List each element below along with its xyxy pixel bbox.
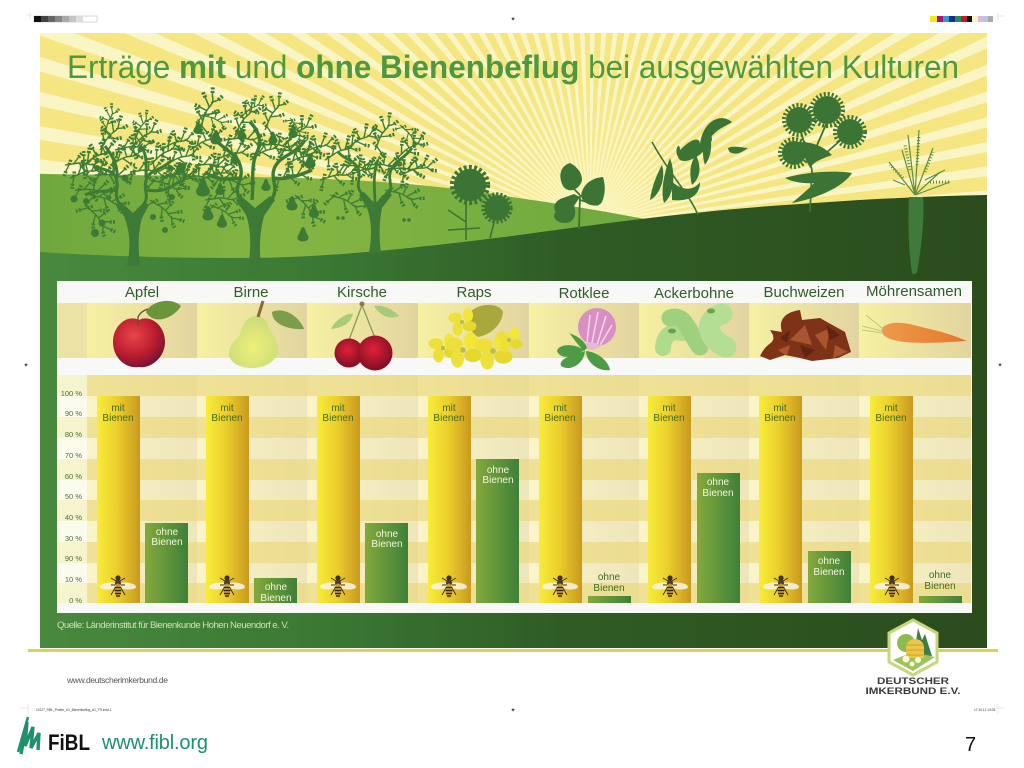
labels: mit Bienen: Bienen: [544, 413, 576, 424]
labels: ohne Bienen on bars: ohne: [376, 529, 399, 540]
labels: ohne Bienen on bars: Bienen: [813, 567, 845, 578]
bar: Buchweizen mit Bienen: [759, 396, 802, 603]
labels: ohne Bienen on bars: ohne: [487, 465, 510, 476]
image: field beans: [663, 308, 726, 348]
column headings: Birne: [233, 284, 269, 301]
logo: FiBL: [18, 717, 90, 755]
registration marks: ✦: [510, 707, 516, 714]
y axis labels: 30 %: [65, 534, 82, 543]
labels: ohne Bienen on bars: ohne: [156, 527, 179, 538]
illustration: red clover: [554, 163, 605, 229]
bar: Rotklee mit Bienen: [539, 396, 582, 603]
colour bar: [930, 16, 993, 22]
background: sun rays: [40, 33, 987, 333]
image row background: [57, 303, 971, 358]
labels: ohne Bienen above small bars: ohne: [929, 570, 952, 581]
illustration: pear tree: [162, 84, 340, 276]
labels: mit Bienen: Bienen: [102, 413, 134, 424]
column headings: [125, 283, 962, 302]
illustration: field bean: [650, 118, 748, 215]
labels: ohne Bienen on bars: ohne: [818, 556, 841, 567]
bar: Kirsche ohne Bienen: [365, 523, 408, 603]
illustration: rapeseed plants: [448, 167, 511, 240]
y axis labels: 10 %: [65, 575, 82, 584]
print slug text: 10127_FiBL_Poster_A1_Bienenbeflug_A1_TR.indd 1: [36, 708, 112, 712]
print slug text: [36, 708, 995, 712]
title: Erträge mit und ohne Bienenbeflug bei ausgewählten Kulturen: [67, 49, 959, 85]
column headings: Kirsche: [337, 284, 387, 301]
bar: Möhrensamen mit Bienen: [870, 396, 913, 603]
labels: ohne Bienen above small bars: ohne: [598, 572, 621, 583]
bar: Apfel mit Bienen: [97, 396, 140, 603]
y axis labels: 60 %: [65, 472, 82, 481]
bar: Apfel ohne Bienen: [145, 523, 188, 603]
illustration: carrot plant: [889, 130, 950, 274]
y axis labels: 40 %: [65, 513, 82, 522]
labels: mit Bienen: Bienen: [322, 413, 354, 424]
registration marks: ✦: [997, 362, 1003, 369]
hills: [40, 174, 987, 648]
light green hill: [40, 174, 660, 300]
bar: Ackerbohne ohne Bienen: [697, 473, 740, 603]
labels: ohne Bienen on bars: Bienen: [482, 475, 514, 486]
image: buckwheat grains: [760, 310, 851, 361]
bar: Rotklee ohne Bienen: [588, 596, 631, 603]
labels: mit Bienen: mit: [553, 403, 567, 414]
labels: ohne Bienen above small bars: Bienen: [924, 581, 956, 592]
y axis labels: 80 %: [65, 430, 82, 439]
page number: 7: [965, 734, 976, 756]
column headings: Rotklee: [559, 285, 609, 302]
registration marks: ✦: [23, 362, 29, 369]
source note: Quelle: Länderinstitut für Bienenkunde Hohen Neuendorf e. V.: [57, 620, 289, 631]
print slug text: 17.10.12 13:03: [974, 708, 995, 712]
labels: mit Bienen: mit: [111, 403, 125, 414]
bar: Birne mit Bienen: [206, 396, 249, 603]
column headings: Buchweizen: [764, 284, 844, 301]
image: red clover: [557, 308, 616, 370]
labels: mit Bienen: mit: [331, 403, 345, 414]
column headings: Apfel: [125, 284, 159, 301]
column headings: Ackerbohne: [654, 285, 734, 302]
bar: Möhrensamen ohne Bienen: [919, 596, 962, 603]
labels: mit Bienen: Bienen: [764, 413, 796, 424]
logo: Deutscher Imkerbund: [866, 620, 960, 697]
registration marks: ✦: [510, 16, 516, 23]
y axis labels: [61, 389, 82, 605]
y axis labels: 70 %: [65, 451, 82, 460]
labels: mit Bienen: Bienen: [211, 413, 243, 424]
labels: mit Bienen: mit: [773, 403, 787, 414]
labels: mit Bienen: mit: [662, 403, 676, 414]
labels: mit Bienen: mit: [884, 403, 898, 414]
image: cherries: [331, 302, 399, 370]
labels: ohne Bienen on bars: Bienen: [260, 593, 292, 604]
y axis labels: 50 %: [65, 492, 82, 501]
bar: Birne ohne Bienen: [254, 578, 297, 603]
labels: mit Bienen: mit: [442, 403, 456, 414]
bar: Raps ohne Bienen: [476, 459, 519, 603]
labels: ohne Bienen on bars: ohne: [265, 582, 288, 593]
labels: ohne Bienen on bars: Bienen: [702, 488, 734, 499]
bar: Buchweizen ohne Bienen: [808, 551, 851, 603]
logo: FiBL: FiBL: [48, 730, 90, 755]
labels: ohne Bienen on bars: [151, 465, 845, 604]
labels: ohne Bienen on bars: ohne: [707, 477, 730, 488]
chart band background: [57, 375, 971, 603]
bar: Kirsche mit Bienen: [317, 396, 360, 603]
bar: Ackerbohne mit Bienen: [648, 396, 691, 603]
panel: yield chart: [57, 281, 972, 613]
labels: ohne Bienen above small bars: Bienen: [593, 583, 625, 594]
y axis labels: 90 %: [65, 554, 82, 563]
labels: mit Bienen: mit: [220, 403, 234, 414]
y axis labels: 90 %: [65, 409, 82, 418]
column headings: Raps: [456, 284, 492, 301]
y axis labels: 100 %: [61, 389, 82, 398]
website: deutscherimkerbund: www.deutscherimkerbund.de: [66, 675, 168, 685]
logo: Deutscher Imkerbund: IMKERBUND E.V.: [866, 686, 960, 697]
yellow baseline: [28, 649, 998, 652]
image: carrot: [862, 315, 967, 343]
column headings: Möhrensamen: [866, 283, 962, 300]
icons: bees: [100, 575, 910, 598]
image: rapeseed flowers: [429, 305, 523, 369]
image: pear: [229, 301, 304, 368]
illustration: buckwheat: [780, 94, 865, 212]
image: apple: [113, 301, 181, 367]
grayscale bar: [34, 16, 97, 22]
y axis labels: 0 %: [69, 596, 82, 605]
illustration: cherry tree: [320, 109, 440, 253]
labels: ohne Bienen on bars: Bienen: [151, 537, 183, 548]
labels: mit Bienen: [102, 403, 907, 424]
dark green hill and frame: [40, 195, 987, 648]
labels: mit Bienen: Bienen: [875, 413, 907, 424]
labels: mit Bienen: Bienen: [653, 413, 685, 424]
illustration: apple tree: [63, 101, 206, 266]
labels: ohne Bienen on bars: Bienen: [371, 539, 403, 550]
website: fibl.org: www.fibl.org: [101, 732, 208, 754]
logo: Deutscher Imkerbund: DEUTSCHER: [877, 676, 949, 687]
labels: ohne Bienen above small bars: [593, 570, 956, 594]
labels: mit Bienen: Bienen: [433, 413, 465, 424]
bar: Raps mit Bienen: [428, 396, 471, 603]
